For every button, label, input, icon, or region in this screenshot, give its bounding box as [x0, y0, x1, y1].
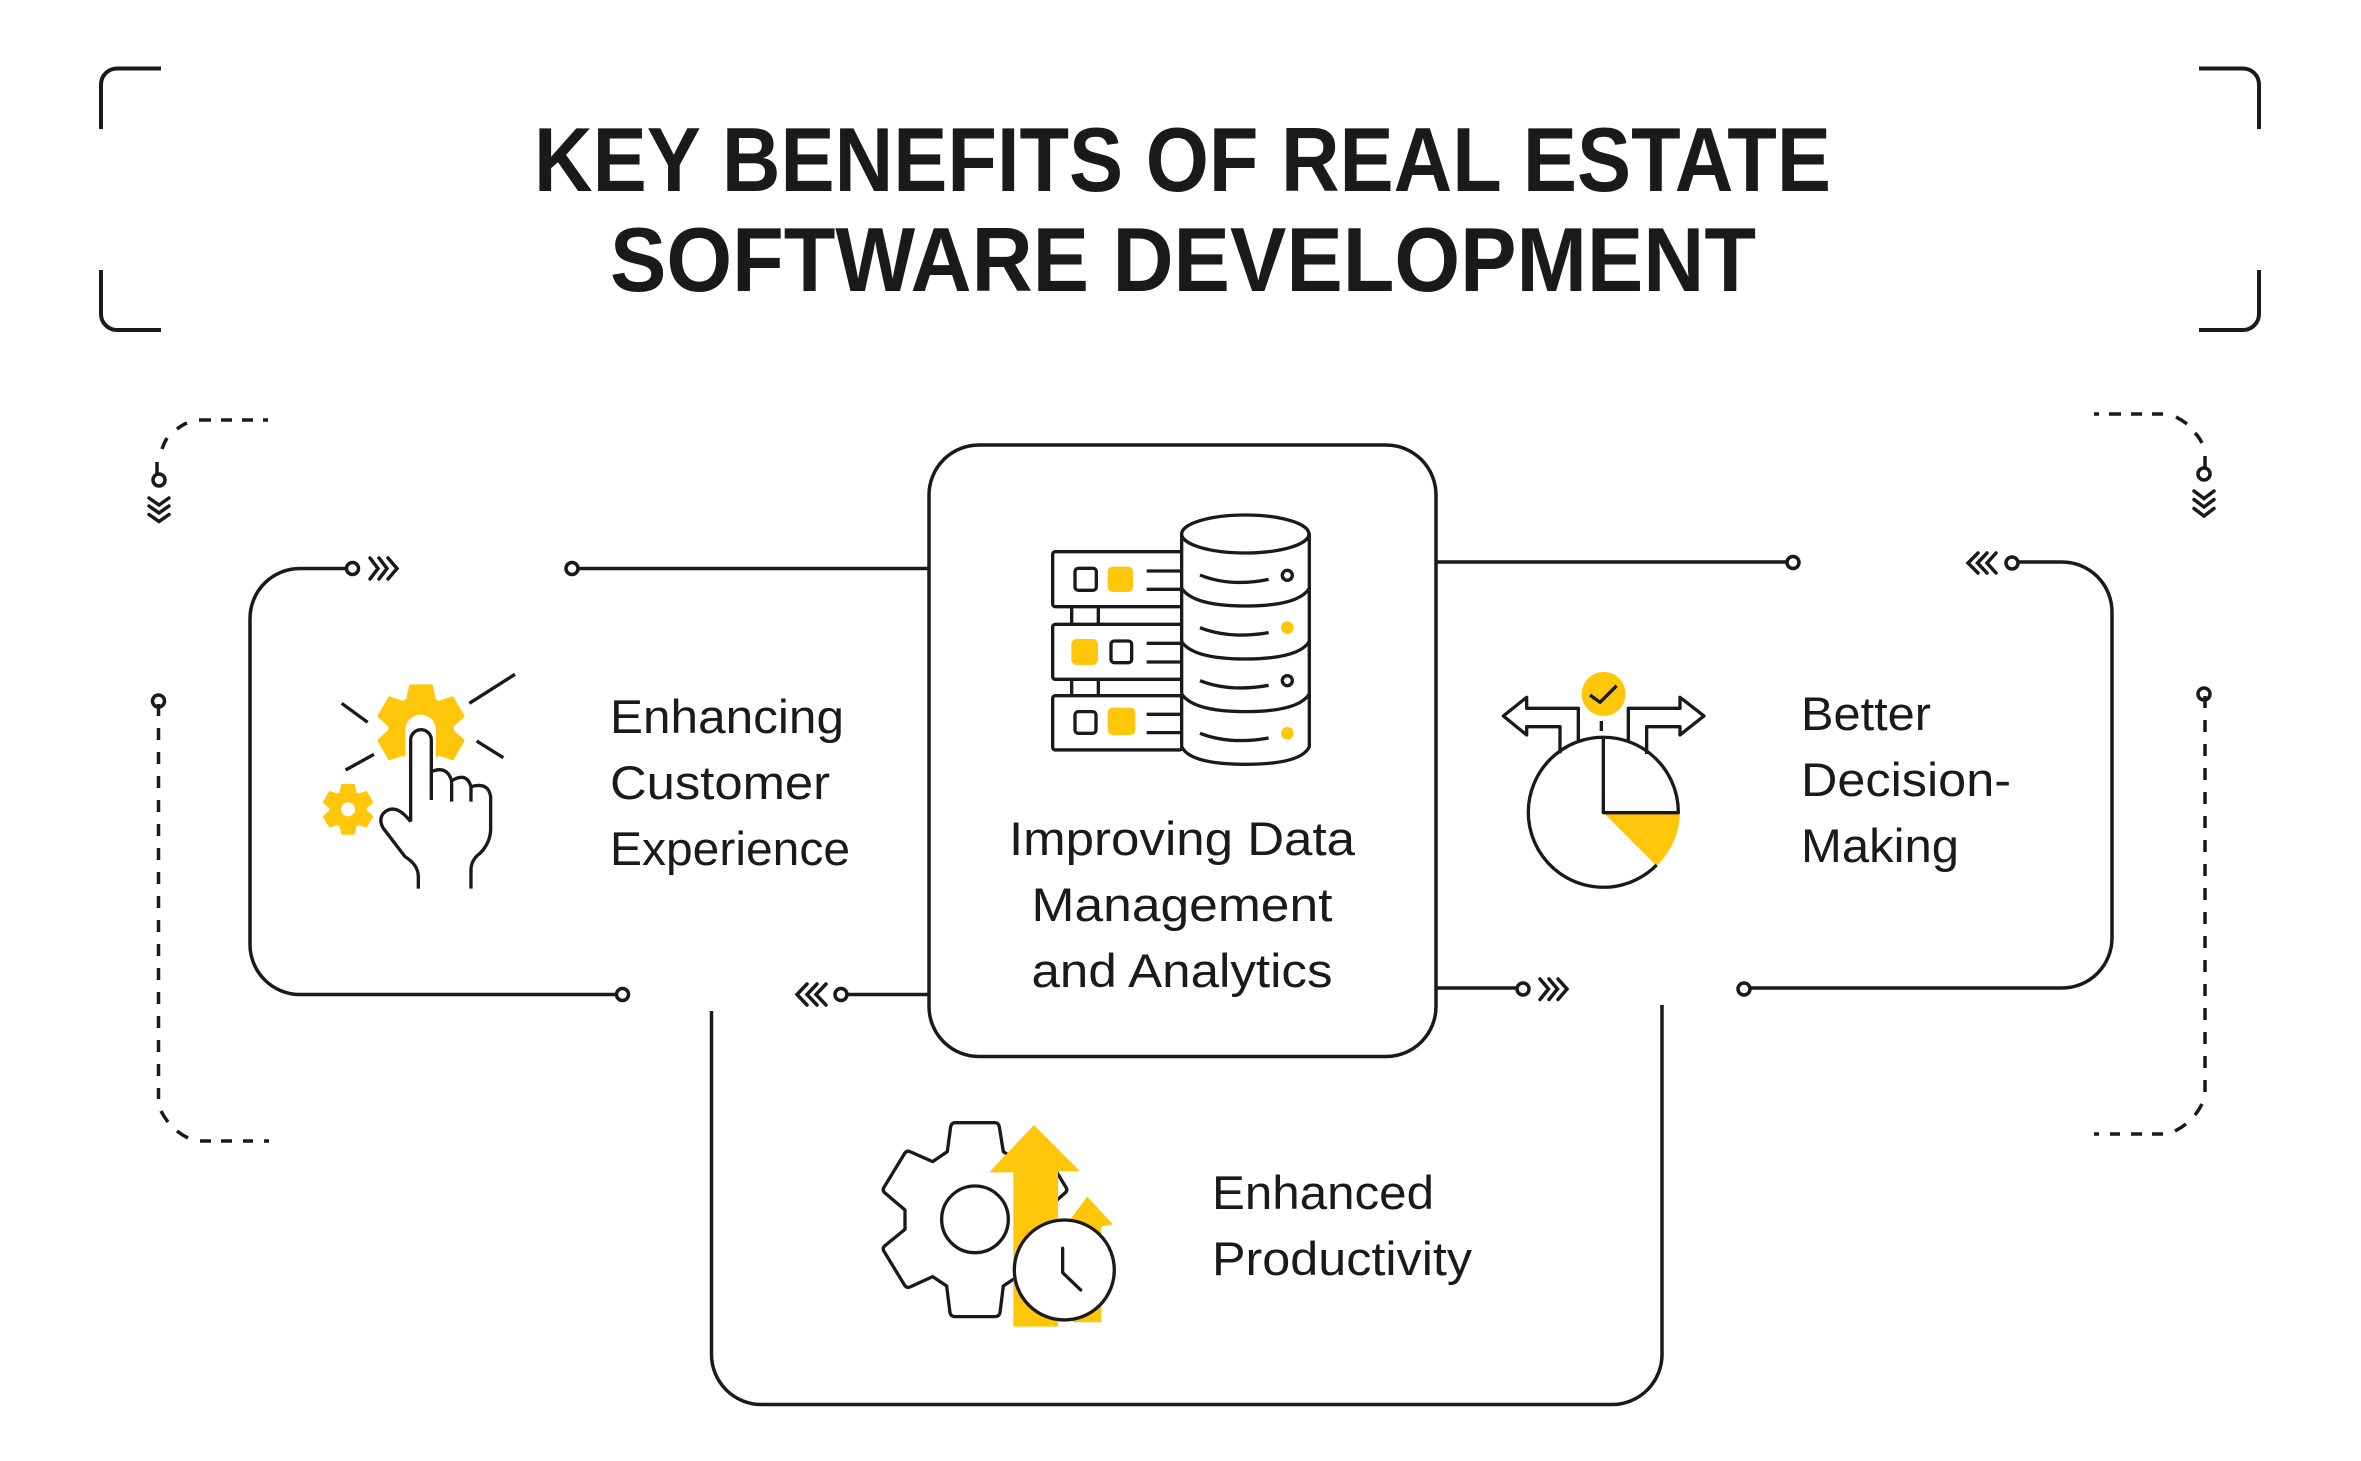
connector lines [566, 556, 1799, 1005]
card outline left [250, 558, 629, 1000]
panel: improving data management and analytics [566, 445, 1799, 1056]
label: better decision-making [1801, 687, 2011, 872]
label: enhancing customer experience: Experience [610, 822, 850, 875]
panel: enhancing customer experience [250, 558, 850, 1000]
title: SOFTWARE DEVELOPMENT [610, 210, 1756, 311]
label: better decision-making: Better [1801, 687, 1931, 740]
card outline right [1738, 553, 2112, 995]
label: improving data management and analytics: and Analytics [1032, 944, 1332, 997]
label: improving data management and analytics: Improving Data [1009, 812, 1356, 865]
label: improving data management and analytics: Management [1032, 878, 1332, 931]
dashed connector: top left [149, 420, 268, 522]
icon: gear, arrows and clock [883, 1123, 1114, 1326]
label: enhanced productivity [1212, 1166, 1473, 1285]
icon: pie chart with arrows and check [1503, 672, 1704, 887]
label: enhanced productivity: Productivity [1212, 1232, 1473, 1285]
icon: database and servers [1053, 515, 1309, 764]
dashed connector: bottom right [2094, 688, 2210, 1134]
dashed connector: top right [2094, 414, 2214, 516]
card outline bottom [711, 1005, 1662, 1404]
label: improving data management and analytics [1009, 812, 1356, 997]
label: enhancing customer experience: Enhancing [610, 690, 844, 743]
label: better decision-making: Decision- [1801, 753, 2011, 806]
center card [929, 445, 1436, 1056]
title corner brackets [101, 68, 2259, 330]
title [534, 110, 1831, 311]
label: better decision-making: Making [1801, 819, 1959, 872]
label: enhancing customer experience: Customer [610, 756, 830, 809]
panel: better decision-making [1503, 553, 2112, 995]
dashed connector: bottom left [152, 695, 269, 1141]
panel: enhanced productivity [711, 1005, 1662, 1404]
label: enhanced productivity: Enhanced [1212, 1166, 1434, 1219]
label: enhancing customer experience [610, 690, 850, 875]
title: KEY BENEFITS OF REAL ESTATE [534, 110, 1831, 211]
icon: gear and pointing hand [323, 674, 515, 889]
